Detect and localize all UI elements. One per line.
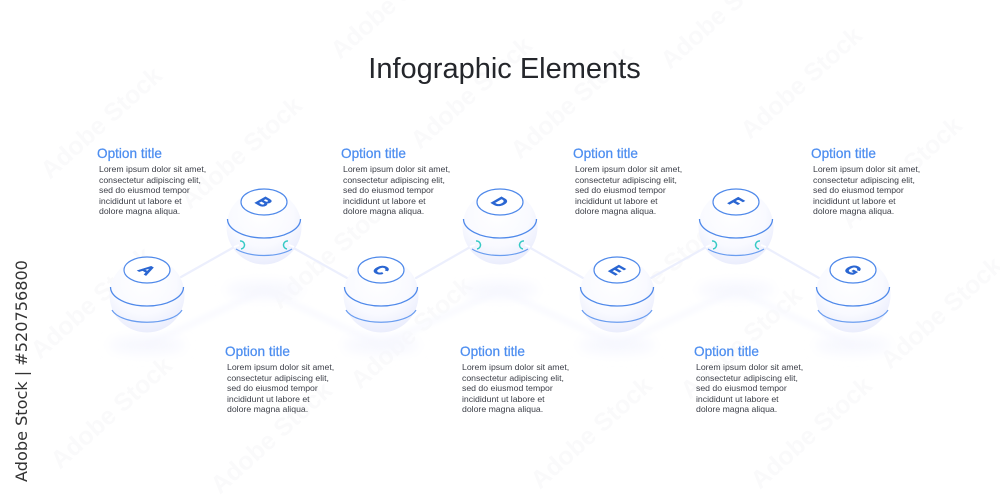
text block: option E: incididunt ut labore et xyxy=(575,196,658,206)
watermark pattern: Adobe Stock xyxy=(175,91,308,214)
text block: option D: incididunt ut labore et xyxy=(462,394,545,404)
text block: option A: Lorem ipsum dolor sit amet, xyxy=(99,164,206,174)
letter B: B xyxy=(250,195,277,210)
text block: option E xyxy=(573,146,682,216)
text block: option A: Option title xyxy=(97,146,162,161)
title: Infographic Elements xyxy=(368,53,641,85)
text block: option F: Option title xyxy=(694,344,759,359)
watermark pattern: Adobe Stock xyxy=(345,271,478,394)
connector ports xyxy=(706,241,766,249)
watermark pattern: Adobe Stock xyxy=(505,41,638,164)
text block: option B: dolore magna aliqua. xyxy=(227,404,308,414)
letter E: E xyxy=(604,263,629,278)
text block: option C: dolore magna aliqua. xyxy=(343,206,424,216)
sphere G xyxy=(816,257,890,332)
text block: option D: consectetur adipiscing elit, xyxy=(462,373,564,383)
text block: option B: consectetur adipiscing elit, xyxy=(227,373,329,383)
sphere B xyxy=(226,189,302,264)
watermark pattern: Adobe Stock xyxy=(25,241,158,364)
text block: option G: sed do eiusmod tempor xyxy=(813,185,904,195)
watermark pattern: Adobe Stock xyxy=(405,31,538,154)
text block: option C xyxy=(341,146,450,216)
text block: option B: incididunt ut labore et xyxy=(227,394,310,404)
text block: option G xyxy=(811,146,920,216)
text block: option C: Option title xyxy=(341,146,406,161)
text block: option A: dolore magna aliqua. xyxy=(99,206,180,216)
text block: option G: incididunt ut labore et xyxy=(813,196,896,206)
text block: option B: Option title xyxy=(225,344,290,359)
text block: option B: Lorem ipsum dolor sit amet, xyxy=(227,362,334,372)
watermark pattern: Adobe Stock xyxy=(735,21,868,144)
text block: option A: incididunt ut labore et xyxy=(99,196,182,206)
watermark pattern: Adobe Stock xyxy=(205,376,338,499)
connector lines xyxy=(181,246,819,278)
letter F: F xyxy=(723,195,748,209)
text block: option A: sed do eiusmod tempor xyxy=(99,185,190,195)
watermark pattern: Adobe Stock xyxy=(745,371,878,494)
text block: option D: Option title xyxy=(460,344,525,359)
ground shadows xyxy=(109,282,891,353)
watermark pattern: Adobe Stock xyxy=(45,351,178,474)
text block: option F: incididunt ut labore et xyxy=(696,394,779,404)
watermark pattern: Adobe Stock xyxy=(595,211,728,334)
text block: option E: Lorem ipsum dolor sit amet, xyxy=(575,164,682,174)
text block: option D: dolore magna aliqua. xyxy=(462,404,543,414)
sphere E xyxy=(580,257,654,332)
text block: option F xyxy=(694,344,803,414)
text block: option F: dolore magna aliqua. xyxy=(696,404,777,414)
text block: option A xyxy=(97,146,206,216)
text block: option G: Lorem ipsum dolor sit amet, xyxy=(813,164,920,174)
text block: option C: Lorem ipsum dolor sit amet, xyxy=(343,164,450,174)
text block: option F: consectetur adipiscing elit, xyxy=(696,373,798,383)
letter G: G xyxy=(839,263,866,278)
sphere C xyxy=(344,257,418,332)
watermark pattern: Adobe Stock xyxy=(265,191,398,314)
text block: option A: consectetur adipiscing elit, xyxy=(99,175,201,185)
text block: option C: incididunt ut labore et xyxy=(343,196,426,206)
text block: option G: consectetur adipiscing elit, xyxy=(813,175,915,185)
text block: option C: sed do eiusmod tempor xyxy=(343,185,434,195)
text block: option B: sed do eiusmod tempor xyxy=(227,383,318,393)
connector ports xyxy=(470,241,530,249)
watermark pattern: Adobe Stock xyxy=(675,281,808,404)
text block: option F: sed do eiusmod tempor xyxy=(696,383,787,393)
text block: option E: dolore magna aliqua. xyxy=(575,206,656,216)
text block: option D: Lorem ipsum dolor sit amet, xyxy=(462,362,569,372)
text block: option G: Option title xyxy=(811,146,876,161)
sphere A xyxy=(110,257,184,332)
letter D: D xyxy=(486,195,513,210)
connector ports xyxy=(234,241,294,249)
sphere D xyxy=(462,189,538,264)
text block: option B xyxy=(225,344,334,414)
letter A: A xyxy=(133,263,160,278)
text block: option D xyxy=(460,344,569,414)
text block: option F: Lorem ipsum dolor sit amet, xyxy=(696,362,803,372)
text block: option E: consectetur adipiscing elit, xyxy=(575,175,677,185)
side credit: Adobe Stock | #520756800 xyxy=(12,260,31,482)
watermark pattern: Adobe Stock xyxy=(835,111,968,234)
text block: option E: sed do eiusmod tempor xyxy=(575,185,666,195)
text block: option G: dolore magna aliqua. xyxy=(813,206,894,216)
letter C: C xyxy=(367,263,394,278)
text block: option D: sed do eiusmod tempor xyxy=(462,383,553,393)
watermark pattern: Adobe Stock xyxy=(35,61,168,184)
sphere F xyxy=(698,189,774,264)
watermark pattern: Adobe Stock xyxy=(525,371,658,494)
text block: option C: consectetur adipiscing elit, xyxy=(343,175,445,185)
text block: option E: Option title xyxy=(573,146,638,161)
